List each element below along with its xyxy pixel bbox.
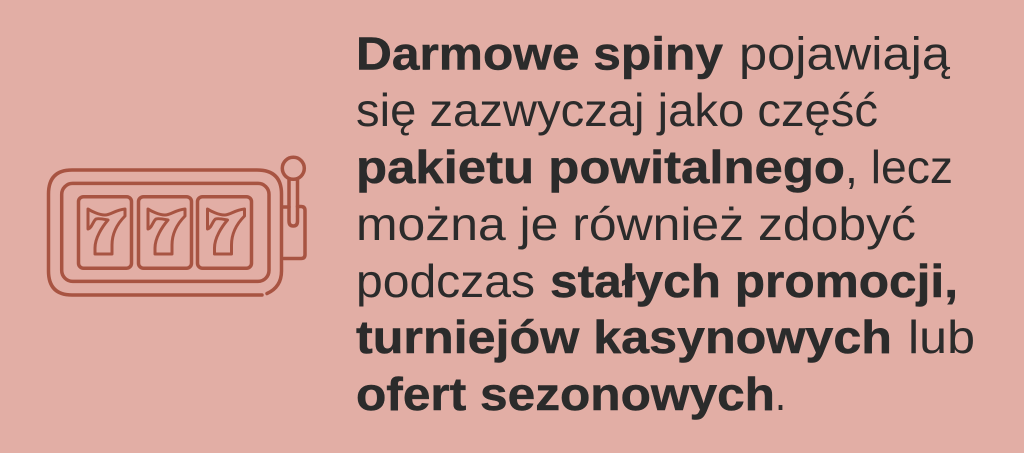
text block: description: Darmowe spiny [356,28,723,80]
icon: slot machine [48,157,305,295]
text block: description: podczas [356,255,535,307]
text block: description: się zazwyczaj jako część [356,84,878,136]
text block: description: stałych promocji, [550,255,958,307]
text block: description: . [775,368,786,420]
text block: description: , lecz [845,141,953,193]
text block: description [356,28,975,420]
text block: description: pakietu powitalnego [356,141,845,193]
text block: description: ofert sezonowych [356,368,775,420]
text block: description: lub [908,311,975,363]
text block: description: turniejów kasynowych [356,311,892,363]
text block: description: pojawiają [739,28,950,80]
text block: description: można je również zdobyć [356,198,916,250]
